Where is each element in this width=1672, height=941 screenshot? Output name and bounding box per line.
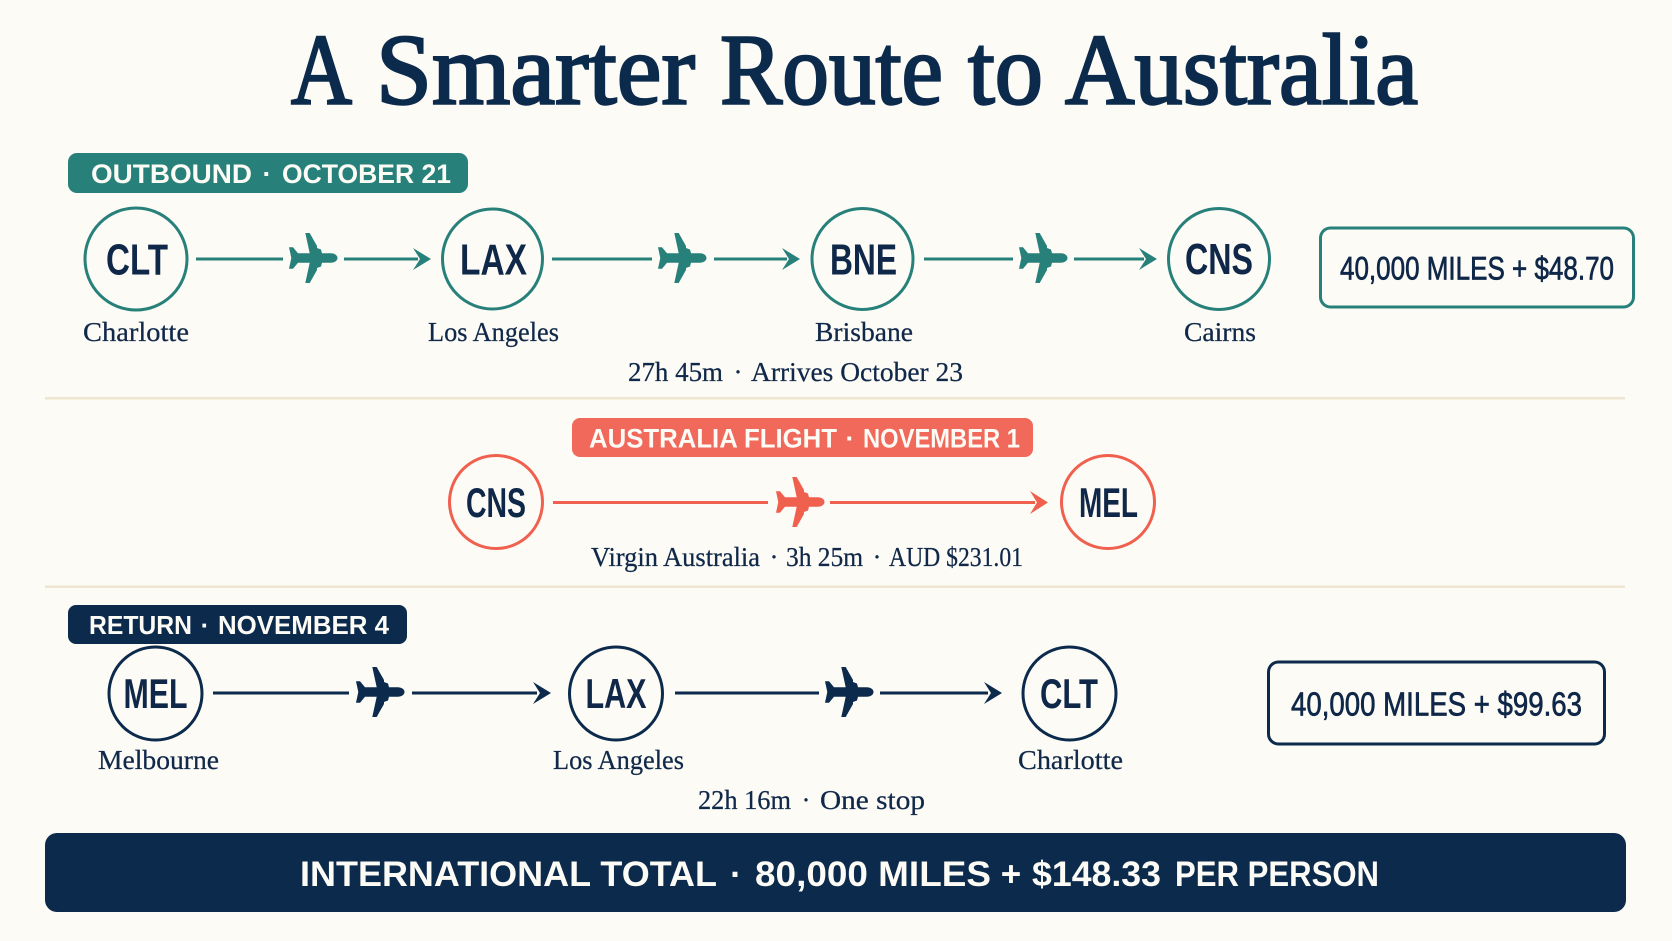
return cost box: 40,000 MILES + $99.63: [1291, 686, 1582, 722]
stop: CLT Charlotte: Charlotte: [83, 317, 189, 347]
stop: MEL Melbourne: [98, 647, 219, 775]
stop: CLT Charlotte: CLT: [106, 236, 168, 284]
return badge: NOVEMBER 4: [218, 610, 390, 640]
arrow: BNE to CNS: [924, 248, 1157, 270]
stop: LAX Los Angeles: [553, 647, 684, 775]
outbound badge: ·: [262, 159, 272, 189]
stop: LAX Los Angeles: Los Angeles: [553, 745, 684, 775]
outbound duration: [628, 357, 963, 387]
total banner: [45, 833, 1626, 912]
stop: MEL: MEL: [1079, 479, 1138, 526]
title: Australia: [1065, 14, 1418, 126]
outbound badge: [68, 153, 468, 193]
title: Smarter: [376, 14, 695, 126]
stop: CNS: CNS: [466, 479, 526, 526]
stop: CLT Charlotte: [1018, 647, 1123, 775]
return duration: ·: [802, 785, 810, 815]
Australia flight badge: NOVEMBER 1: [863, 424, 1020, 454]
outbound badge: OUTBOUND: [91, 159, 252, 189]
stop: LAX Los Angeles: LAX: [586, 670, 646, 717]
return badge: [68, 605, 407, 644]
stop: MEL Melbourne: MEL: [124, 670, 188, 717]
total banner: PER PERSON: [1175, 855, 1379, 894]
stop: BNE Brisbane: Brisbane: [815, 317, 913, 347]
total banner: $148.33: [1032, 855, 1161, 894]
stop: CNS Cairns: CNS: [1185, 235, 1253, 284]
stop: LAX Los Angeles: Los Angeles: [428, 317, 559, 347]
icon: plane: [776, 477, 824, 527]
Australia flight details: [591, 542, 1023, 572]
icon: plane: [825, 667, 874, 717]
outbound duration: ·: [734, 357, 742, 387]
total banner: INTERNATIONAL TOTAL: [300, 855, 717, 894]
title: A: [291, 14, 352, 126]
Australia flight badge: [572, 418, 1033, 457]
total banner: +: [1001, 855, 1021, 894]
outbound duration: Arrives October 23: [751, 357, 963, 387]
stop: CLT Charlotte: CLT: [1040, 670, 1098, 717]
stop: BNE Brisbane: BNE: [830, 236, 897, 284]
Australia flight details: ·: [770, 542, 778, 572]
total banner: ·: [730, 855, 742, 894]
return cost box: [1268, 662, 1604, 744]
stop: MEL: [1062, 456, 1154, 548]
title: to: [968, 14, 1043, 126]
title: [291, 14, 1418, 126]
return duration: One stop: [820, 785, 925, 815]
panel: Australia flight: [450, 418, 1154, 572]
return duration: [698, 785, 925, 815]
arrow: CNS to MEL: [553, 491, 1048, 514]
icon: plane: [1019, 233, 1068, 283]
arrow: LAX to BNE: [552, 248, 800, 270]
arrow: MEL to LAX: [213, 682, 551, 704]
stop: MEL Melbourne: Melbourne: [98, 745, 219, 775]
Australia flight badge: AUSTRALIA FLIGHT: [589, 424, 837, 454]
title: Route: [720, 14, 943, 126]
arrow: CLT to LAX: [196, 248, 431, 270]
arrow: LAX to CLT: [675, 682, 1002, 704]
stop: CNS Cairns: [1168, 208, 1270, 347]
icon: plane: [289, 233, 338, 283]
panel: return: [68, 605, 1604, 815]
Australia flight details: Virgin Australia: [591, 542, 760, 572]
return duration: 22h 16m: [698, 785, 791, 815]
outbound badge: OCTOBER 21: [282, 159, 451, 189]
stop: CLT Charlotte: [83, 208, 189, 347]
icon: plane: [658, 233, 706, 283]
outbound duration: 27h 45m: [628, 357, 723, 387]
icon: plane: [356, 667, 404, 717]
Australia flight details: AUD $231.01: [889, 542, 1023, 572]
stop: CNS: [450, 456, 542, 548]
outbound cost box: 40,000 MILES + $48.70: [1340, 250, 1614, 286]
Australia flight details: ·: [872, 542, 882, 572]
total banner: 80,000 MILES: [755, 855, 991, 894]
stop: LAX Los Angeles: LAX: [460, 236, 527, 284]
panel: outbound: [68, 153, 1634, 387]
return badge: RETURN: [89, 610, 192, 640]
Australia flight badge: ·: [846, 424, 854, 454]
stop: BNE Brisbane: [812, 208, 913, 347]
return badge: ·: [201, 610, 209, 640]
Australia flight details: 3h 25m: [786, 542, 863, 572]
stop: LAX Los Angeles: [428, 209, 559, 347]
outbound cost box: [1320, 228, 1634, 307]
stop: CLT Charlotte: Charlotte: [1018, 745, 1123, 775]
stop: CNS Cairns: Cairns: [1184, 317, 1256, 347]
